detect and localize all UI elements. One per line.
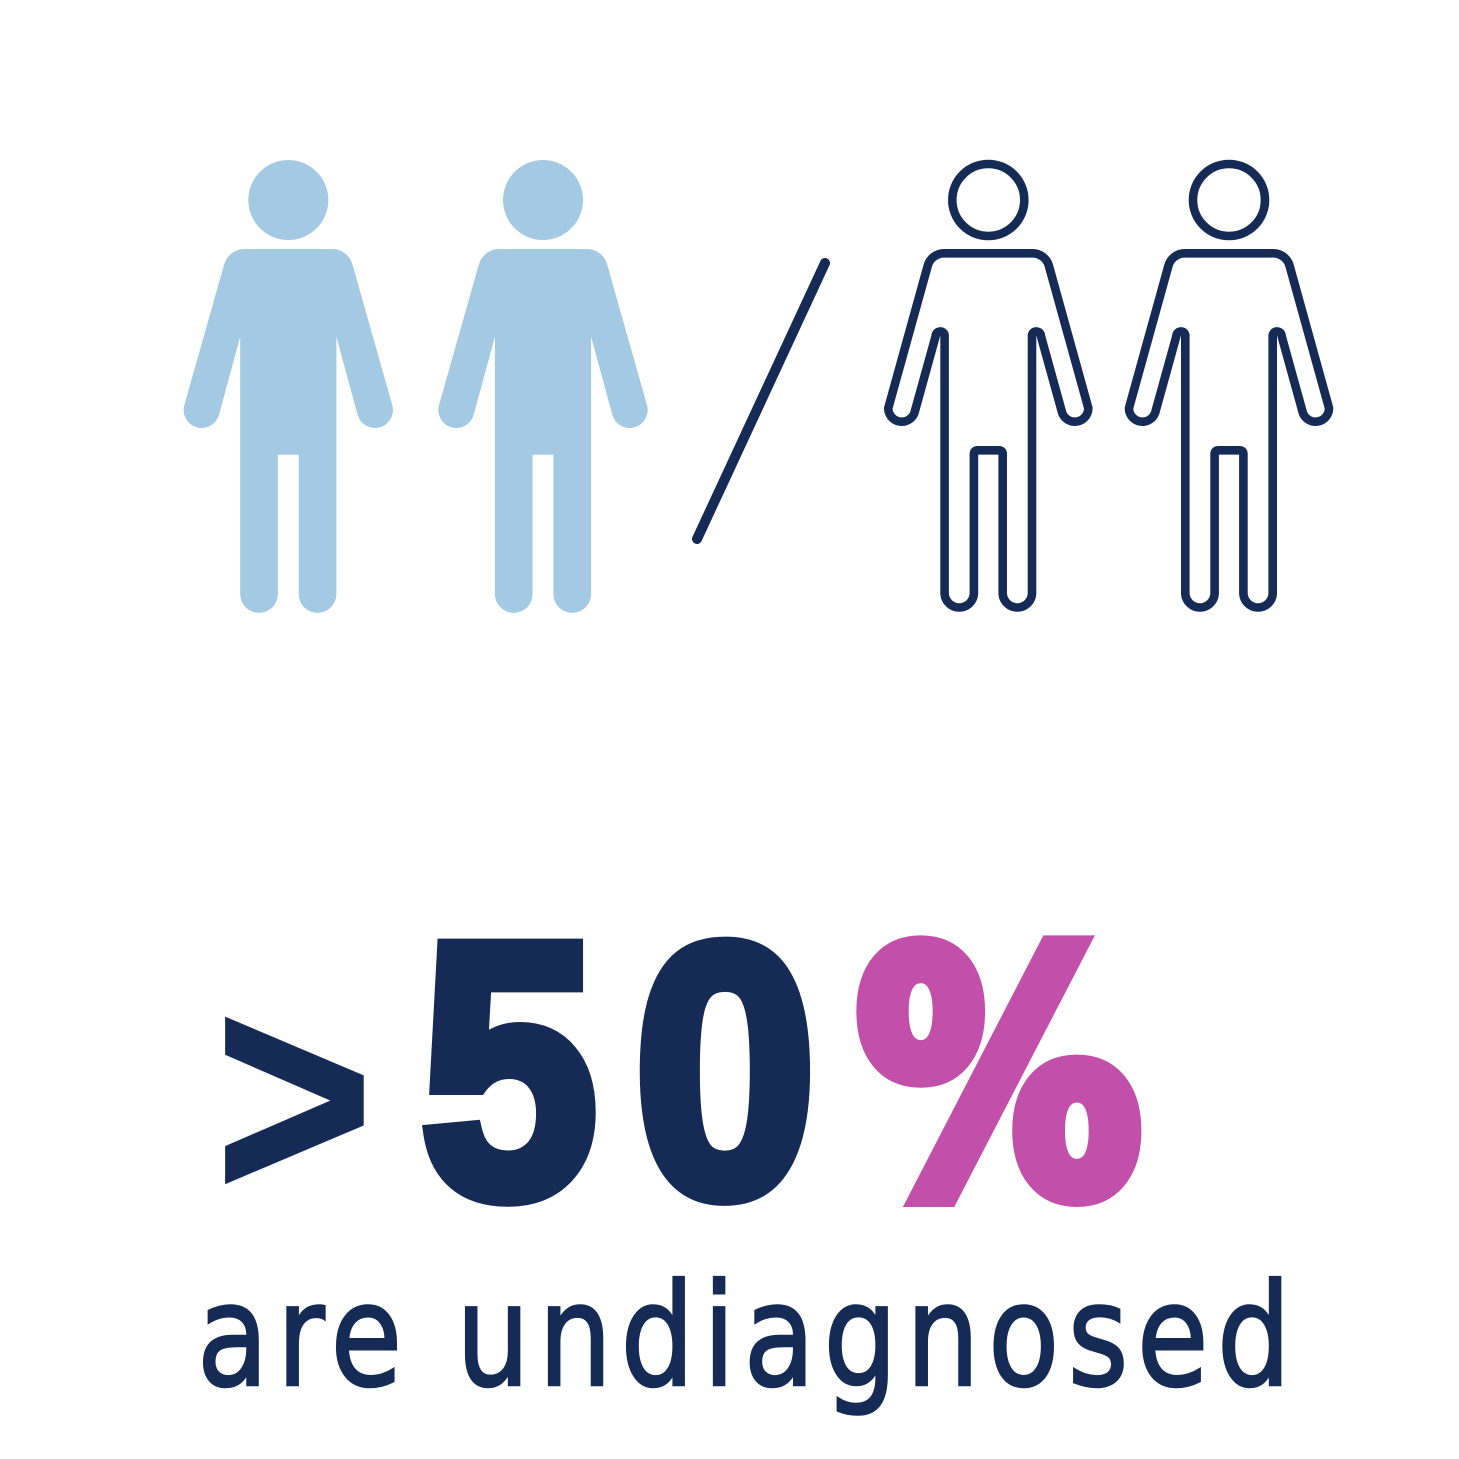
percent sign: % [856, 884, 1142, 1270]
icon: filled person 1 [184, 160, 393, 613]
statistic: greater than 50 percent [216, 869, 1142, 1271]
caption: are undiagnosed [197, 1253, 1291, 1419]
icon: outlined person 1 [888, 164, 1088, 607]
slash divider [697, 263, 825, 539]
icon: filled person 2 [438, 160, 648, 613]
digit 0: 0 [635, 872, 816, 1270]
greater-than sign: > [216, 930, 372, 1263]
digit 5: 5 [421, 869, 597, 1271]
icon: outlined person 2 [1129, 164, 1329, 607]
